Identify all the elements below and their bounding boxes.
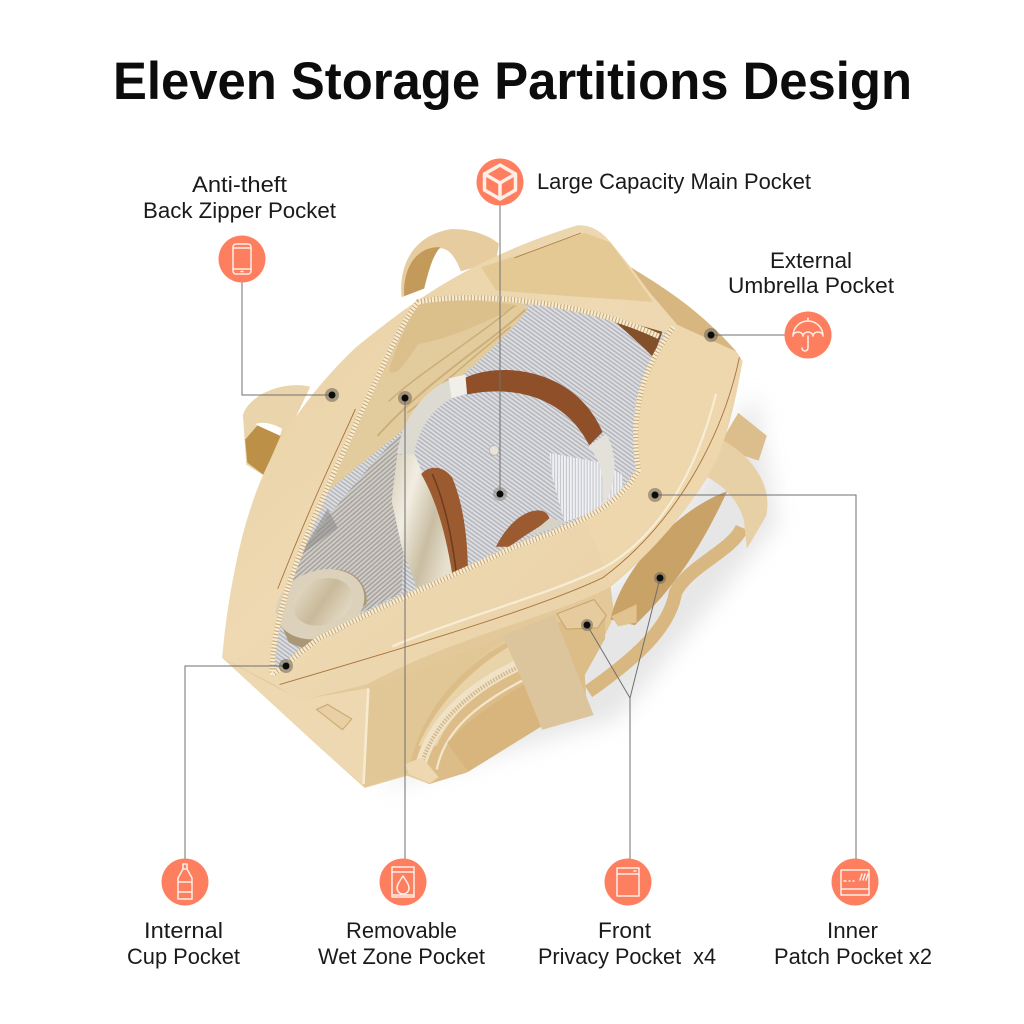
title: Eleven Storage Partitions Design <box>113 52 912 111</box>
water bottle <box>267 558 373 651</box>
silver arm right <box>588 434 615 509</box>
dark corner <box>611 317 662 357</box>
back top handle <box>401 229 499 297</box>
leader: cup pocket <box>185 666 286 859</box>
icon: wet pocket <box>380 858 426 906</box>
leader: front privacy <box>587 578 660 859</box>
label: main pocket: Large Capacity Main Pocket <box>537 169 812 194</box>
right flap of panel <box>585 327 736 583</box>
pocket zip tab <box>611 604 637 626</box>
label: patch pocket <box>774 918 932 969</box>
shirt interior <box>270 298 674 673</box>
bottle side <box>276 569 367 650</box>
right handle strap <box>588 528 742 691</box>
end panel <box>223 659 367 786</box>
label: anti-theft: Anti-theft <box>192 172 288 197</box>
dot: main pocket <box>493 487 507 501</box>
dot: wet zone <box>398 391 412 405</box>
ear cup <box>392 454 455 587</box>
front grab strap <box>503 615 594 730</box>
left handle <box>243 385 310 480</box>
inner pocket lining <box>389 300 518 373</box>
main opening <box>267 298 674 673</box>
lower front panel <box>364 635 511 786</box>
icon: cube <box>476 158 524 206</box>
leader: wet zone <box>404 398 406 859</box>
leader: inner patch <box>655 495 856 859</box>
panel piping seams <box>280 357 739 685</box>
leader: umbrella <box>711 334 785 336</box>
label: wet zone <box>318 918 486 969</box>
icon: front pocket <box>604 858 652 906</box>
shirt pocket <box>550 453 623 522</box>
ear pad <box>421 468 468 574</box>
label: cup pocket: Internal <box>144 918 223 943</box>
label: wet zone: Wet Zone Pocket <box>318 944 486 969</box>
label: front privacy: Privacy Pocket x4 <box>538 944 716 969</box>
label: patch pocket: Inner <box>827 918 878 943</box>
lower shirt fold <box>281 428 407 635</box>
label: umbrella: External <box>770 248 852 273</box>
second cup edge <box>529 518 566 535</box>
label: umbrella <box>728 248 895 298</box>
upper zipper tab <box>557 600 606 629</box>
lower front flap <box>447 683 544 772</box>
second ear pad <box>496 510 550 547</box>
dot: front pocket left <box>581 619 593 631</box>
zipper teeth <box>272 298 674 675</box>
dot: cup pocket <box>279 659 293 673</box>
right side pocket <box>611 491 727 625</box>
icon: bottle <box>162 858 208 906</box>
bag photo <box>222 225 777 788</box>
main top panel <box>222 225 743 701</box>
headphones <box>392 370 615 587</box>
dot: front pocket right <box>654 572 666 584</box>
inner zip pocket <box>326 298 529 493</box>
silver arm left <box>405 384 463 455</box>
label: front privacy <box>538 918 716 969</box>
icon: patch pocket <box>832 858 878 906</box>
icon: phone <box>218 236 266 282</box>
bag shadow <box>378 394 777 788</box>
upper shirt shadow <box>299 509 338 556</box>
label: cup pocket <box>127 918 241 969</box>
fold top <box>481 233 653 302</box>
end loop <box>317 704 352 730</box>
callout dots <box>279 328 718 673</box>
bag silhouette base <box>222 225 743 788</box>
icon: umbrella <box>784 312 832 358</box>
label: patch pocket: Patch Pocket x2 <box>774 944 932 969</box>
inside of left handle <box>245 425 281 475</box>
label: front privacy: Front <box>598 918 652 943</box>
headband <box>466 370 603 445</box>
dot: umbrella <box>704 328 718 342</box>
zipper edge <box>272 298 674 675</box>
end gusset right <box>631 267 736 352</box>
leader: main pocket <box>499 205 501 494</box>
zipper end tab <box>405 757 439 783</box>
bottle lid <box>267 558 373 651</box>
dot: anti-theft <box>325 388 339 402</box>
label: wet zone: Removable <box>346 918 457 943</box>
label: anti-theft: Back Zipper Pocket <box>143 198 337 223</box>
label: cup pocket: Cup Pocket <box>127 944 241 969</box>
silver hinge <box>449 375 467 398</box>
far end tab <box>718 413 767 461</box>
hole in left handle <box>255 423 282 436</box>
inside of back handle <box>404 247 440 296</box>
shirt button <box>489 445 499 455</box>
front pocket zipper <box>421 663 522 763</box>
label: umbrella: Umbrella Pocket <box>728 273 895 298</box>
right handle loop <box>701 440 767 549</box>
panel seam <box>364 688 368 784</box>
front pocket upper <box>418 642 526 746</box>
label: anti-theft <box>143 172 337 223</box>
leader: anti-theft <box>242 282 332 395</box>
front pocket <box>409 616 605 784</box>
dot: inner patch <box>648 488 662 502</box>
